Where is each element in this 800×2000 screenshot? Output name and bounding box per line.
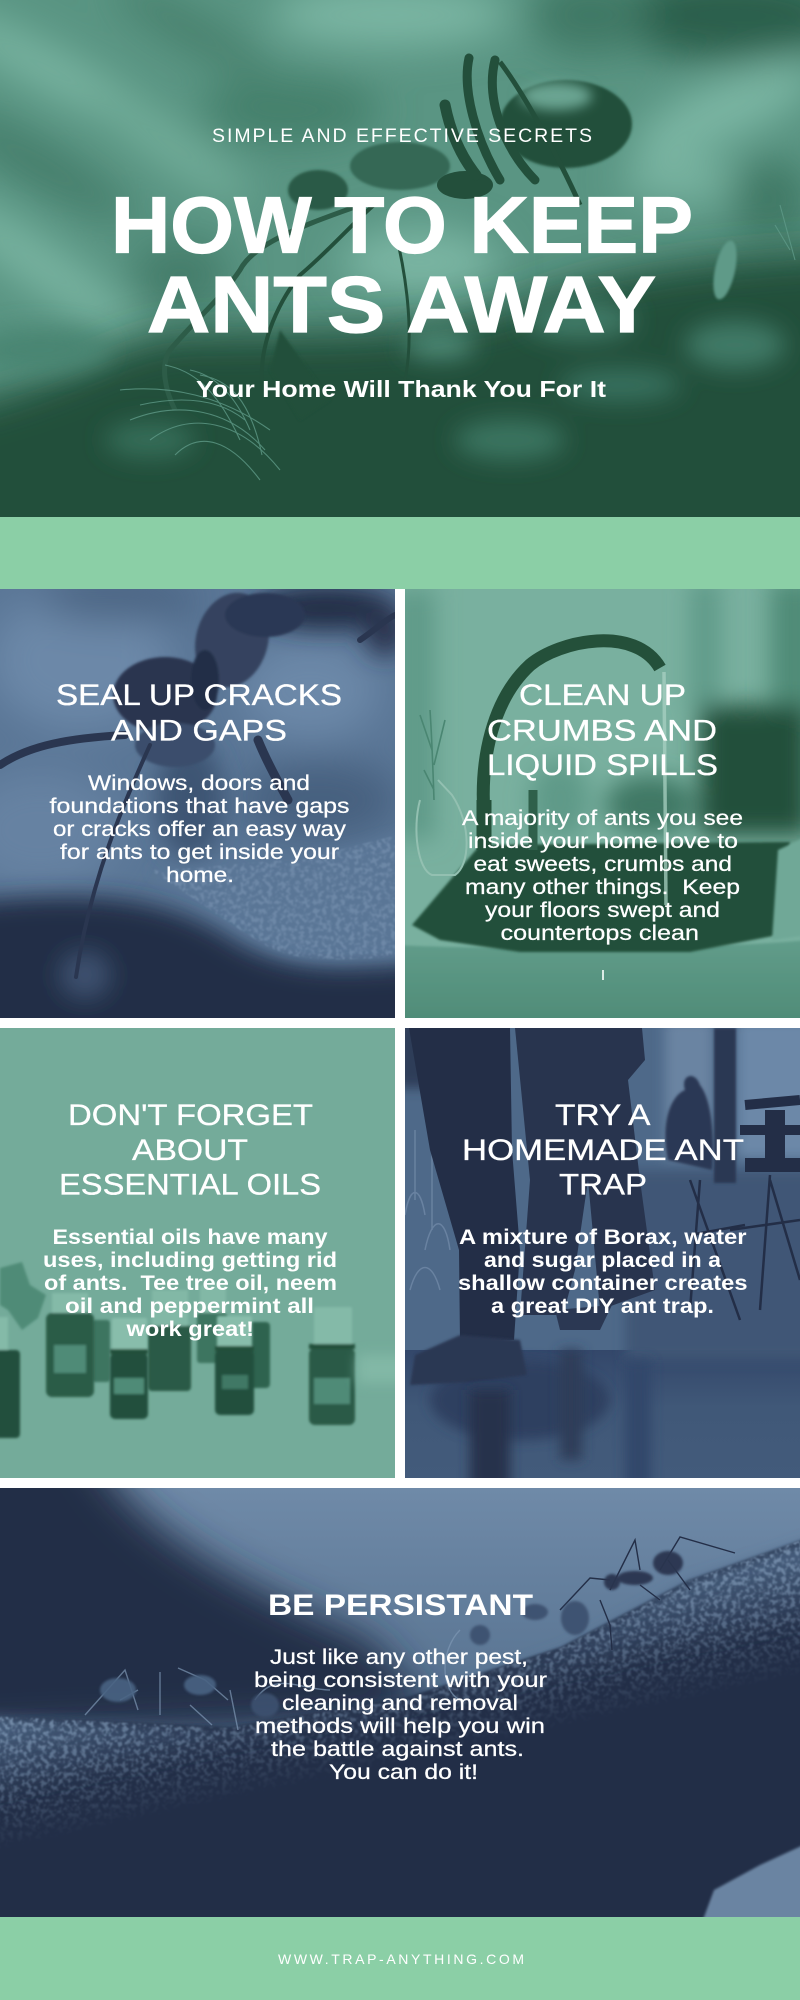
photo: legs in a cafe in navy duotone bbox=[395, 1020, 800, 1490]
panel: homemade ant trap bbox=[395, 1020, 800, 1490]
ivy leaf bbox=[0, 1262, 46, 1330]
footer url: WWW.TRAP-ANYTHING.COM bbox=[278, 1951, 524, 1967]
heading: AND GAPS bbox=[111, 715, 287, 748]
person in window bbox=[665, 1076, 713, 1170]
body text: A majority of ants you see bbox=[462, 807, 743, 830]
heading: BE PERSISTANT bbox=[268, 1589, 533, 1622]
photo: essential oil bottles in green duotone bbox=[0, 1028, 408, 1478]
body text: oil and peppermint all bbox=[65, 1295, 314, 1318]
green divider band bbox=[0, 517, 800, 589]
wall arches bbox=[405, 1130, 450, 1290]
body text bbox=[43, 1226, 337, 1341]
hero subtitle: Your Home Will Thank You For It bbox=[196, 376, 606, 402]
body text: countertops clean bbox=[500, 922, 699, 945]
dark foreground falling off to the bottom bbox=[0, 228, 800, 517]
photo: kitchen faucet in green duotone bbox=[395, 580, 800, 1030]
body text: A mixture of Borax, water bbox=[459, 1226, 746, 1249]
panel: seal up cracks and gaps bbox=[0, 589, 395, 1018]
soft branch tone bbox=[0, 1541, 800, 1790]
panel: clean up crumbs and liquid spills bbox=[395, 580, 800, 1030]
body text: home. bbox=[166, 864, 234, 887]
ants bbox=[560, 1537, 735, 1650]
body text: your floors swept and bbox=[485, 899, 720, 922]
panel: be persistant bbox=[0, 1488, 800, 1917]
heading bbox=[462, 1099, 744, 1202]
body text: cleaning and removal bbox=[282, 1692, 518, 1715]
body text: for ants to get inside your bbox=[60, 841, 339, 864]
right leg and coat bbox=[515, 1028, 655, 1315]
body text: of ants. Tee tree oil, neem bbox=[44, 1272, 337, 1295]
photo: ant close up in navy duotone bbox=[0, 589, 395, 1018]
back bottles bbox=[92, 1285, 270, 1391]
small stray mark bbox=[602, 970, 604, 980]
hero title: ANTS AWAY bbox=[147, 260, 656, 349]
heading: CLEAN UP bbox=[519, 679, 686, 712]
body text: Just like any other pest, bbox=[270, 1646, 528, 1669]
body text: You can do it! bbox=[329, 1761, 478, 1784]
body text: uses, including getting rid bbox=[43, 1249, 337, 1272]
mottled branch surface bbox=[0, 1541, 800, 1836]
front bottles bbox=[0, 1293, 355, 1438]
ant bbox=[165, 58, 632, 410]
heading bbox=[487, 679, 718, 782]
body text: eat sweets, crumbs and bbox=[474, 853, 732, 876]
body text bbox=[254, 1646, 547, 1784]
body text: methods will help you win bbox=[255, 1715, 545, 1738]
hero photo: ant on moss in green duotone bbox=[0, 0, 800, 517]
bar stools bbox=[690, 1100, 800, 1320]
window frame bbox=[714, 1028, 736, 1183]
body text: inside your home love to bbox=[468, 830, 738, 853]
footer band bbox=[0, 1917, 800, 2000]
foreground light corner bbox=[702, 1845, 800, 1917]
body text: the battle against ants. bbox=[271, 1738, 524, 1761]
heading: TRY A bbox=[555, 1099, 651, 1132]
heading: ABOUT bbox=[132, 1134, 248, 1167]
body text bbox=[462, 807, 743, 945]
heading: CRUMBS AND bbox=[487, 715, 717, 748]
faucet bbox=[483, 641, 666, 905]
heading: LIQUID SPILLS bbox=[487, 749, 718, 782]
left leg bbox=[409, 1028, 520, 1342]
body text: a great DIY ant trap. bbox=[491, 1295, 714, 1318]
body text: many other things. Keep bbox=[465, 876, 740, 899]
heading bbox=[56, 679, 342, 748]
dark lower body of branch bbox=[0, 1537, 800, 1930]
shoes bbox=[410, 1335, 527, 1385]
heading: TRAP bbox=[559, 1169, 647, 1202]
vase and dried flower bbox=[416, 710, 467, 875]
photo: ants on a branch in navy duotone bbox=[0, 1488, 800, 1917]
body text bbox=[458, 1226, 748, 1318]
body text: Essential oils have many bbox=[52, 1226, 328, 1249]
body text: Windows, doors and bbox=[88, 772, 310, 795]
heading: SEAL UP CRACKS bbox=[56, 679, 342, 712]
body text: being consistent with your bbox=[254, 1669, 547, 1692]
dark vignette upper left bbox=[0, 1488, 442, 1728]
body text: foundations that have gaps bbox=[50, 795, 350, 818]
body text: work great! bbox=[125, 1318, 254, 1341]
panel: essential oils bbox=[0, 1028, 408, 1478]
heading: HOMEMADE ANT bbox=[462, 1134, 744, 1167]
body text: shallow container creates bbox=[458, 1272, 748, 1295]
panel: hero bbox=[0, 0, 800, 517]
hero eyebrow: SIMPLE AND EFFECTIVE SECRETS bbox=[212, 125, 592, 147]
hero title: HOW TO KEEP bbox=[111, 181, 693, 270]
body text: or cracks offer an easy way bbox=[53, 818, 347, 841]
heading: DON'T FORGET bbox=[68, 1099, 313, 1132]
hero title bbox=[111, 181, 693, 349]
body text bbox=[50, 772, 350, 887]
heading bbox=[59, 1099, 321, 1202]
body text: and sugar placed in a bbox=[484, 1249, 721, 1272]
moss blades bbox=[120, 205, 795, 480]
heading: ESSENTIAL OILS bbox=[59, 1169, 321, 1202]
floor reflections bbox=[470, 1350, 651, 1490]
